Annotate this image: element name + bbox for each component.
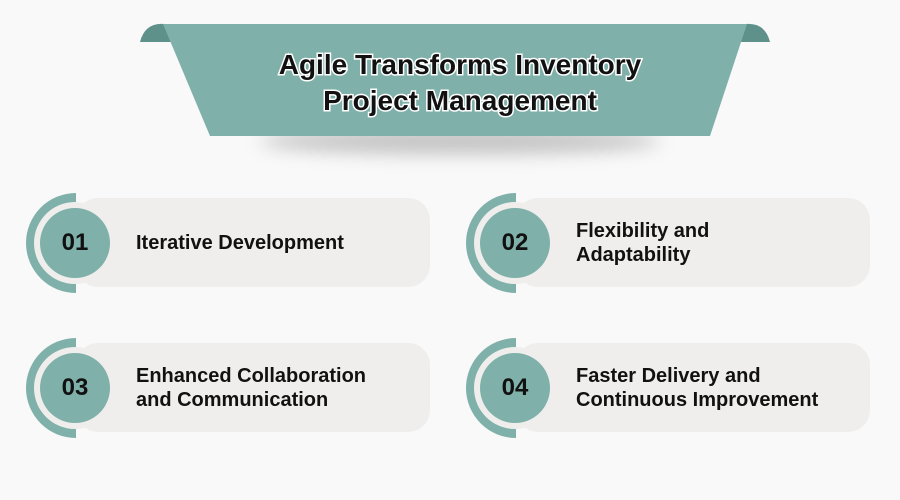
card 02: Adaptability xyxy=(576,244,690,266)
card 02: 02 xyxy=(502,229,528,256)
card 03: 03 xyxy=(62,374,88,401)
card 03: and Communication xyxy=(136,388,328,410)
card 04: Faster Delivery and xyxy=(576,364,761,386)
title banner xyxy=(140,24,770,136)
title banner: Project Management xyxy=(323,85,597,116)
banner shadow xyxy=(260,128,660,154)
card 04: 04 xyxy=(502,374,528,401)
card 04 xyxy=(466,338,870,438)
card 01: 01 xyxy=(62,229,88,256)
card 04: Continuous Improvement xyxy=(576,388,818,410)
card 03 xyxy=(26,338,430,438)
card 01: Iterative Development xyxy=(136,232,344,254)
card 02: Flexibility and xyxy=(576,220,709,242)
card 03: Enhanced Collaboration xyxy=(136,364,366,386)
card 01 xyxy=(26,193,430,293)
title text: Agile Transforms Inventory xyxy=(279,49,642,80)
card 02 xyxy=(466,193,870,293)
